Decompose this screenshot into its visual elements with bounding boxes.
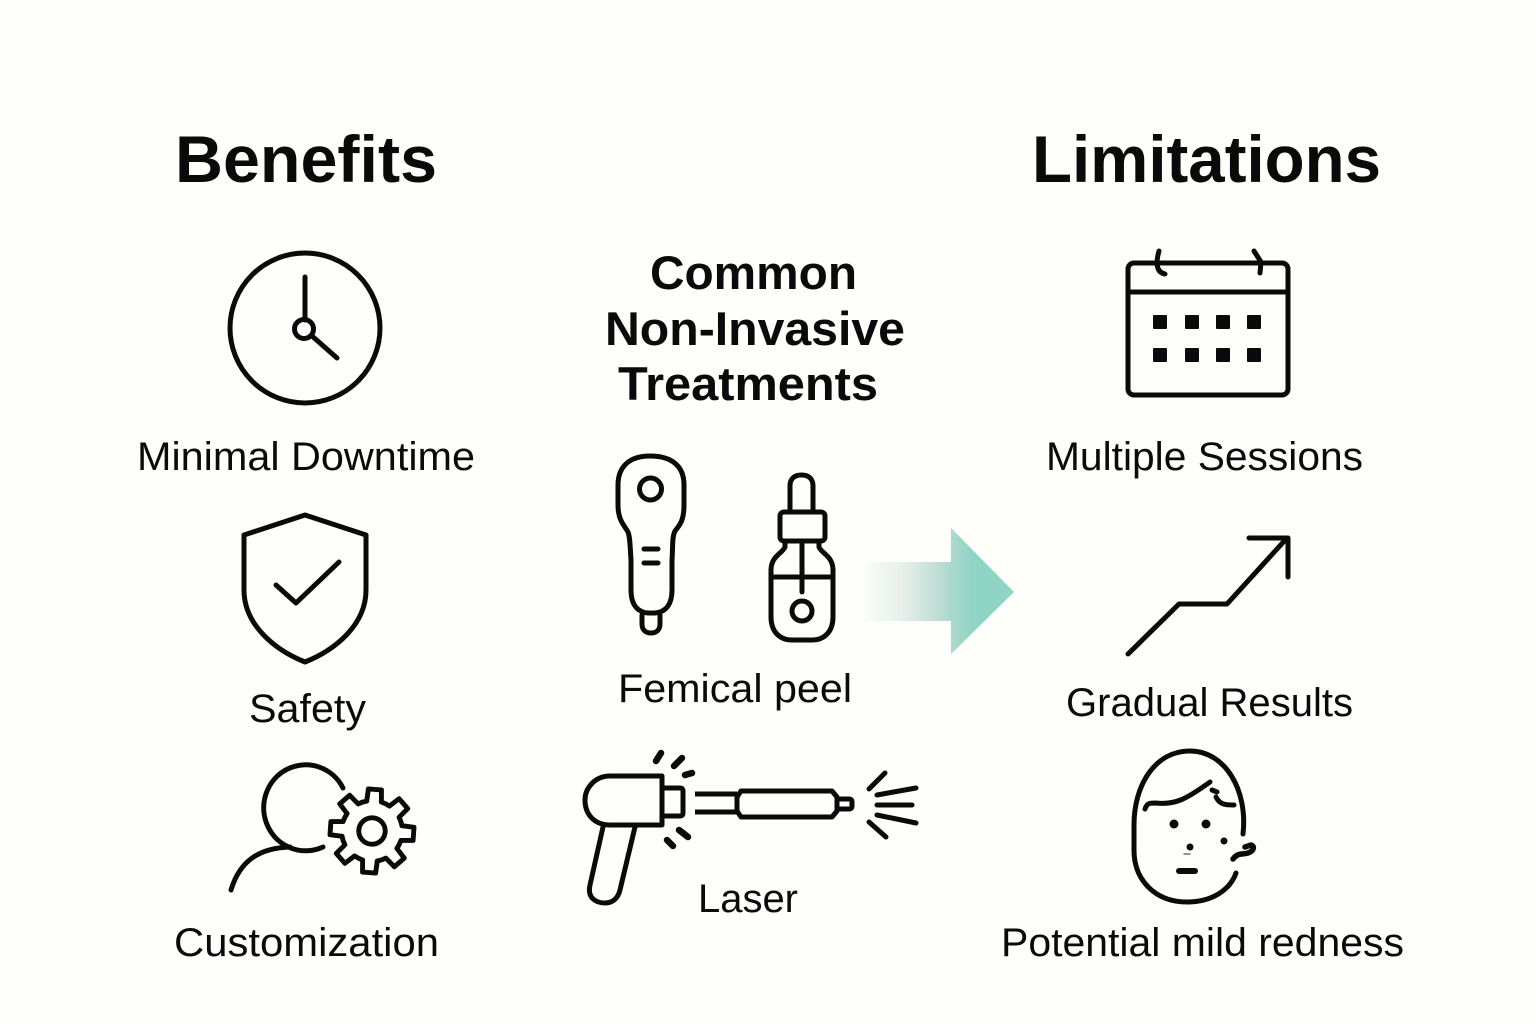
panel: benefits <box>137 122 475 965</box>
icon: shield with check <box>244 515 366 662</box>
icon: clock <box>230 253 380 403</box>
label: Potential mild redness: Potential mild redness <box>1001 921 1404 965</box>
heading: Benefits: Benefits <box>175 122 437 196</box>
icon: person with gear <box>231 765 416 890</box>
panel: common treatments <box>585 246 916 921</box>
heading: Common Non-Invasive Treatments: Treatments <box>618 357 878 410</box>
label: Femical peel: Femical peel <box>618 667 852 711</box>
label: Multiple Sessions: Multiple Sessions <box>1046 435 1363 479</box>
label: Gradual Results: Gradual Results <box>1066 681 1353 725</box>
heading: Common Non-Invasive Treatments <box>605 246 905 410</box>
heading: Common Non-Invasive Treatments: Common <box>650 246 857 299</box>
label: Minimal Downtime: Minimal Downtime <box>137 435 475 479</box>
icon: handheld device <box>618 456 684 633</box>
icon: dropper bottle <box>771 475 833 640</box>
icon: laser device <box>585 753 916 903</box>
arrow: gradient teal pointing right <box>862 528 1014 654</box>
icon: face with redness <box>1134 751 1253 902</box>
icon: rising arrow <box>1128 538 1288 654</box>
panel: limitations <box>1001 122 1404 965</box>
heading: Limitations: Limitations <box>1032 122 1381 196</box>
label: Customization: Customization <box>174 921 439 965</box>
icon: calendar <box>1128 251 1288 395</box>
heading: Common Non-Invasive Treatments: Non-Invasive <box>605 302 905 355</box>
label: Laser: Laser <box>698 877 798 921</box>
label: Safety: Safety <box>249 687 366 731</box>
